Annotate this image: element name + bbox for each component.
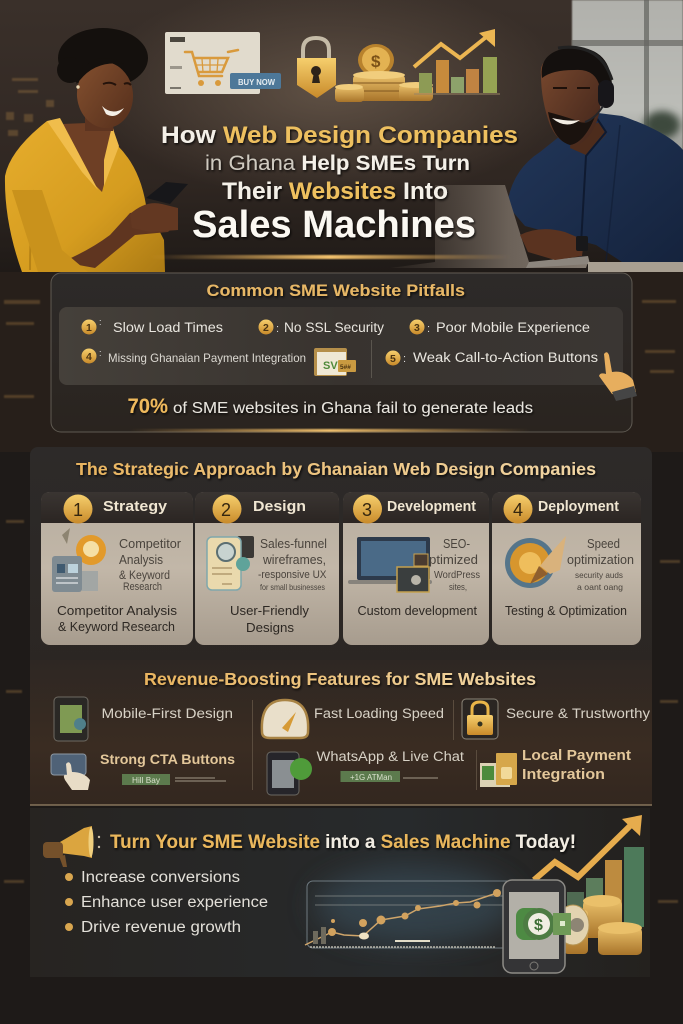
panel: common SME website pitfalls	[51, 273, 637, 432]
icon: smartphone with cash	[503, 880, 571, 973]
feature: whatsapp and live chat: WhatsApp & Live Chat	[316, 749, 464, 764]
icon: stacked coins	[335, 44, 433, 102]
card: 4 deployment: Deployment	[538, 499, 619, 515]
card 4 caption: Testing & Optimization	[505, 603, 627, 618]
pitfalls list box	[59, 307, 623, 385]
benefits list	[65, 869, 268, 936]
title: Sales Machines	[192, 204, 476, 246]
feature: local payment integration	[480, 748, 631, 787]
heading: pitfalls: Common SME Website Pitfalls	[206, 282, 465, 300]
pitfall 1	[82, 317, 223, 335]
card 1 side text: & Keyword	[119, 570, 170, 582]
card 1 side text	[119, 537, 181, 593]
feature: whatsapp and live chat: +1G ATMan	[350, 773, 392, 782]
feature: fast loading speed	[262, 700, 444, 738]
card 2 caption: Designs	[246, 620, 295, 635]
card 2 side text: wireframes,	[262, 553, 326, 567]
pitfall 1: 1	[86, 322, 92, 334]
icon: wireframe phone	[207, 536, 254, 590]
feature: strong CTA buttons: Hill Bay	[132, 776, 160, 785]
panel: strategic approach and features background	[30, 447, 652, 805]
pitfall 3: 3	[414, 322, 420, 334]
icon: rocket target	[505, 536, 566, 588]
pitfall 5: 5	[390, 353, 396, 365]
card 2 side text: -responsive UX	[258, 569, 327, 581]
card: 1 strategy	[41, 492, 193, 645]
card 2 caption	[230, 603, 310, 635]
card 1 caption: Competitor Analysis	[57, 603, 178, 618]
icon: megaphone	[43, 826, 100, 867]
benefits list: Enhance user experience	[81, 894, 268, 911]
card 3 side text: ptimized	[429, 553, 478, 567]
pitfall 1: Slow Load Times	[113, 320, 223, 335]
window behind the man	[572, 0, 683, 200]
panel: call to action	[30, 808, 650, 977]
pitfall 2: :	[276, 323, 279, 335]
card: 3 development	[343, 492, 489, 645]
decorative divider	[30, 804, 652, 806]
feature: mobile-first design: Mobile-First Design	[102, 706, 233, 721]
card 4 side text: optimization	[567, 553, 634, 567]
card: 4 deployment	[492, 492, 641, 645]
icon: pointing hand	[599, 352, 637, 401]
card 1 caption	[57, 603, 178, 634]
card: 2 design	[195, 492, 339, 645]
pitfall 1: :	[99, 317, 102, 327]
icon: payment card: SV	[323, 360, 338, 372]
stat: 70 percent	[128, 395, 533, 418]
pitfall 2: 2	[263, 322, 269, 334]
icon: gold coin stacks	[557, 895, 642, 955]
feature: strong CTA buttons	[51, 752, 235, 790]
card 2 caption: User-Friendly	[230, 603, 310, 618]
card 2 side text	[258, 537, 327, 592]
card 2 side text: Sales-funnel	[260, 537, 327, 551]
icon: payment card: 5##	[340, 364, 351, 371]
card 1 side text: Research	[123, 581, 162, 593]
pitfall 3: Poor Mobile Experience	[436, 320, 590, 335]
title: How Web Design Companies	[161, 122, 518, 149]
card 4 side text	[567, 537, 634, 592]
pitfall 5: Weak Call-to-Action Buttons	[413, 350, 598, 365]
card: 3 development: 3	[362, 500, 372, 520]
pitfall 2: No SSL Security	[284, 320, 384, 335]
pitfall 3: :	[427, 323, 430, 335]
card 4 side text: Speed	[587, 537, 620, 551]
icon: stacked coins: $	[371, 52, 381, 71]
card 3 side text	[429, 537, 480, 593]
card: 1 strategy: Strategy	[103, 498, 168, 515]
card 3 caption: Custom development	[358, 603, 477, 618]
benefits list: Drive revenue growth	[81, 919, 241, 936]
stat: 70 percent: of SME websites in Ghana fail to generate leads	[173, 400, 533, 417]
card: 1 strategy: 1	[73, 500, 83, 520]
title: Their Websites Into	[222, 178, 448, 205]
heading: revenue features: Revenue-Boosting Features for SME Websites	[144, 669, 536, 689]
card 4 side text: a oant oang	[577, 582, 623, 592]
pitfall 4: 4	[86, 351, 92, 363]
icon: shopping cart browser card	[165, 32, 281, 94]
card 1 side text: Analysis	[119, 553, 163, 567]
card 3 side text: WordPress	[434, 569, 480, 581]
heading: strategic approach: The Strategic Approach by Ghanaian Web Design Companies	[76, 459, 596, 479]
icon: growth bar chart with arrow	[414, 29, 500, 94]
line chart dashboard	[305, 867, 517, 948]
icon: idea gear and documents	[52, 528, 106, 592]
card 2 side text: for small businesses	[260, 582, 325, 592]
feature: secure and trustworthy: Secure & Trustworthy	[506, 706, 650, 721]
laptop	[390, 185, 590, 268]
title	[161, 122, 518, 246]
feature: local payment integration: Integration	[522, 767, 605, 783]
icon: padlock	[297, 38, 336, 98]
pitfall 5: :	[403, 353, 406, 365]
card 1 caption: & Keyword Research	[58, 619, 175, 634]
card 3 side text: SEO-	[443, 537, 470, 551]
feature: strong CTA buttons: Strong CTA Buttons	[100, 752, 235, 767]
growth bars and arrow	[534, 815, 644, 932]
heading: call to action: Turn Your SME Website into a Sales Machine Today!	[110, 831, 576, 853]
illustration: woman with phone	[5, 28, 188, 272]
feature: local payment integration: Local Payment	[522, 748, 631, 764]
pitfall 4: Missing Ghanaian Payment Integration	[108, 351, 306, 365]
button: BUY NOW	[238, 78, 275, 87]
phone in the woman's hand	[130, 182, 188, 232]
benefits list: Increase conversions	[81, 869, 240, 886]
icon: payment card	[314, 348, 356, 376]
card: 3 development: Development	[387, 499, 476, 515]
feature: fast loading speed: Fast Loading Speed	[314, 706, 444, 721]
card: 4 deployment: 4	[513, 500, 523, 520]
card 4 side text: security auds	[575, 570, 623, 580]
banknote roll: $	[534, 917, 543, 934]
pitfall 4: :	[99, 348, 102, 358]
card: 2 design: 2	[221, 500, 231, 520]
card 3 side text: sites,	[449, 582, 467, 593]
card: 2 design: Design	[253, 498, 306, 515]
feature: whatsapp and live chat	[267, 749, 464, 795]
icon: laptop with code windows	[348, 537, 432, 592]
stat: 70 percent: 70%	[128, 395, 168, 418]
feature: mobile-first design	[54, 697, 233, 741]
illustration: man with headset	[390, 47, 683, 272]
card 1 side text: Competitor	[119, 537, 181, 551]
title: in Ghana Help SMEs Turn	[205, 152, 470, 175]
decorative gold glow line	[150, 255, 510, 259]
feature: secure and trustworthy	[462, 699, 650, 739]
